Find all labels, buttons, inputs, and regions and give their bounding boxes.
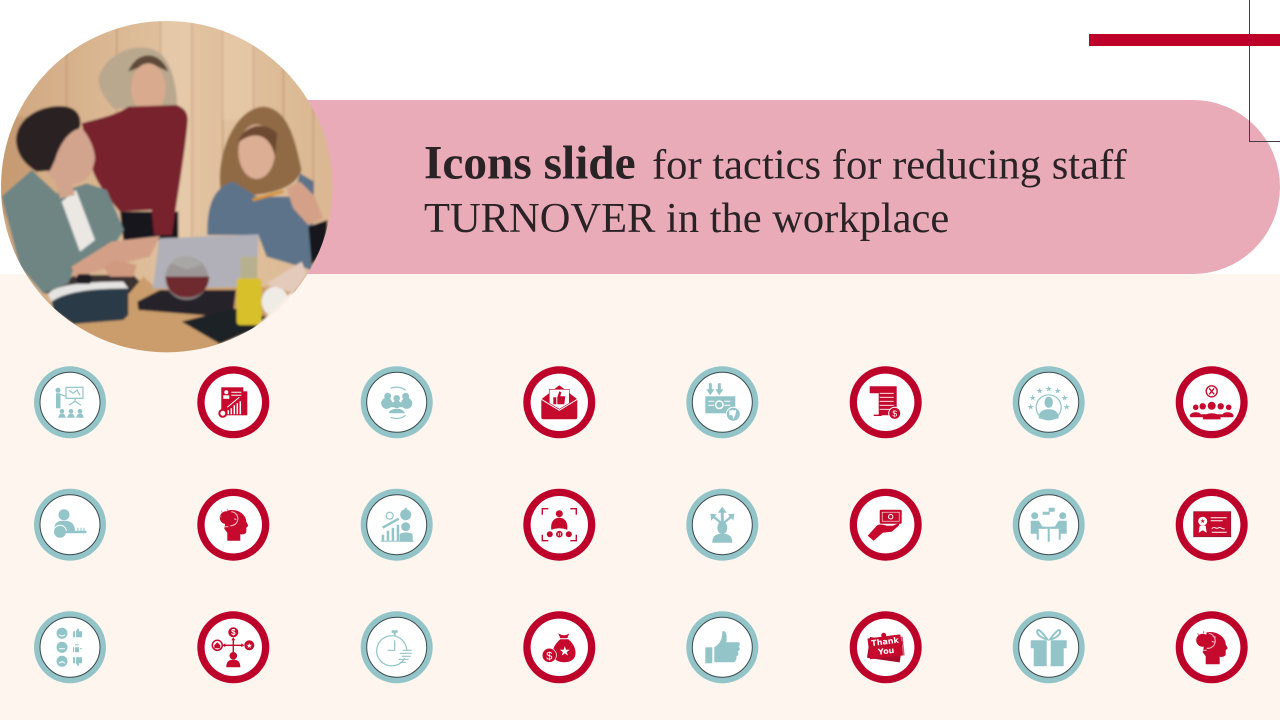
icon 4: envelope with thumbs up xyxy=(523,366,595,438)
icon 24: head with light bulb idea xyxy=(1176,611,1248,683)
icon 7: employee with star rating: ★ xyxy=(1036,386,1043,395)
pale table corner xyxy=(220,292,294,344)
icon 11: growth chart with person and stopwatch xyxy=(361,489,433,561)
title: TURNOVER in the workplace xyxy=(424,195,949,242)
icon 7: employee with star rating: ★ xyxy=(1063,402,1070,411)
pink title band xyxy=(300,100,1280,274)
title: Icons slide xyxy=(424,138,636,190)
icon 19: fast stopwatch xyxy=(361,611,433,683)
icon 17: feedback smileys with thumbs xyxy=(34,611,106,683)
icon 22: thank you card xyxy=(850,611,922,683)
icon 10: head with light bulb xyxy=(197,489,269,561)
icon 16: certificate with ribbon: ★ xyxy=(1200,518,1205,525)
icon 18: person choosing money, home or rewards: ★ xyxy=(246,642,252,650)
icon 12: meditating person with media controls xyxy=(523,489,595,561)
woman in denim jacket xyxy=(207,107,327,270)
icon 16: certificate with ribbon xyxy=(1176,489,1248,561)
icon 7: employee with star rating: ★ xyxy=(1029,393,1036,402)
table xyxy=(65,276,298,352)
icon 9: person with key xyxy=(34,489,106,561)
man in grey shirt xyxy=(2,106,160,293)
icon 8: team with cancel cycle xyxy=(1176,366,1248,438)
icon 7: employee with star rating: ★ xyxy=(1045,384,1052,393)
paper xyxy=(267,262,307,293)
notebooks xyxy=(137,290,236,316)
thin corner frame xyxy=(1250,0,1280,142)
title: for tactics for reducing staff xyxy=(652,142,1127,188)
icon 21: thumbs up xyxy=(686,611,758,683)
icon 20: money bag with star and coin xyxy=(523,611,595,683)
standing woman xyxy=(82,47,188,240)
icon 15: two people meeting at table xyxy=(1013,489,1085,561)
icon 3: team with circular arrows xyxy=(361,366,433,438)
icon 6: scroll contract with dollar xyxy=(850,366,922,438)
icon 7: employee with star rating: ★ xyxy=(1054,386,1061,395)
juice bottle xyxy=(237,257,262,325)
icon 7: employee with star rating xyxy=(1013,366,1085,438)
laptop xyxy=(153,234,259,289)
icon 20: money bag with star and coin: ★ xyxy=(559,644,571,659)
icon 13: person with diverging arrows xyxy=(686,489,758,561)
VR headset case xyxy=(48,274,128,324)
icon 6: scroll contract with dollar: $ xyxy=(892,408,897,418)
icon 18: person choosing money, home or rewards xyxy=(197,611,269,683)
icon 5: banknote with arrows and thumbs down xyxy=(686,366,758,438)
red accent bar xyxy=(1089,34,1280,46)
icon 20: money bag with star and coin: $ xyxy=(546,650,552,662)
white cup xyxy=(262,287,288,317)
icon 2: report with growth chart xyxy=(197,366,269,438)
icon 23: gift box xyxy=(1013,611,1085,683)
icon 1: presentation to team xyxy=(34,366,106,438)
icon 22: thank you card: Thank xyxy=(871,636,900,648)
cream lower background xyxy=(0,274,1280,720)
photo: three colleagues around a laptop xyxy=(1,21,332,352)
icon 14: hand holding money xyxy=(850,489,922,561)
icon 7: employee with star rating: ★ xyxy=(1027,402,1034,411)
teapot xyxy=(165,256,209,300)
icon 22: thank you card: You xyxy=(877,646,895,657)
icon 7: employee with star rating: ★ xyxy=(1061,393,1068,402)
icon 18: person choosing money, home or rewards: $ xyxy=(231,628,236,637)
